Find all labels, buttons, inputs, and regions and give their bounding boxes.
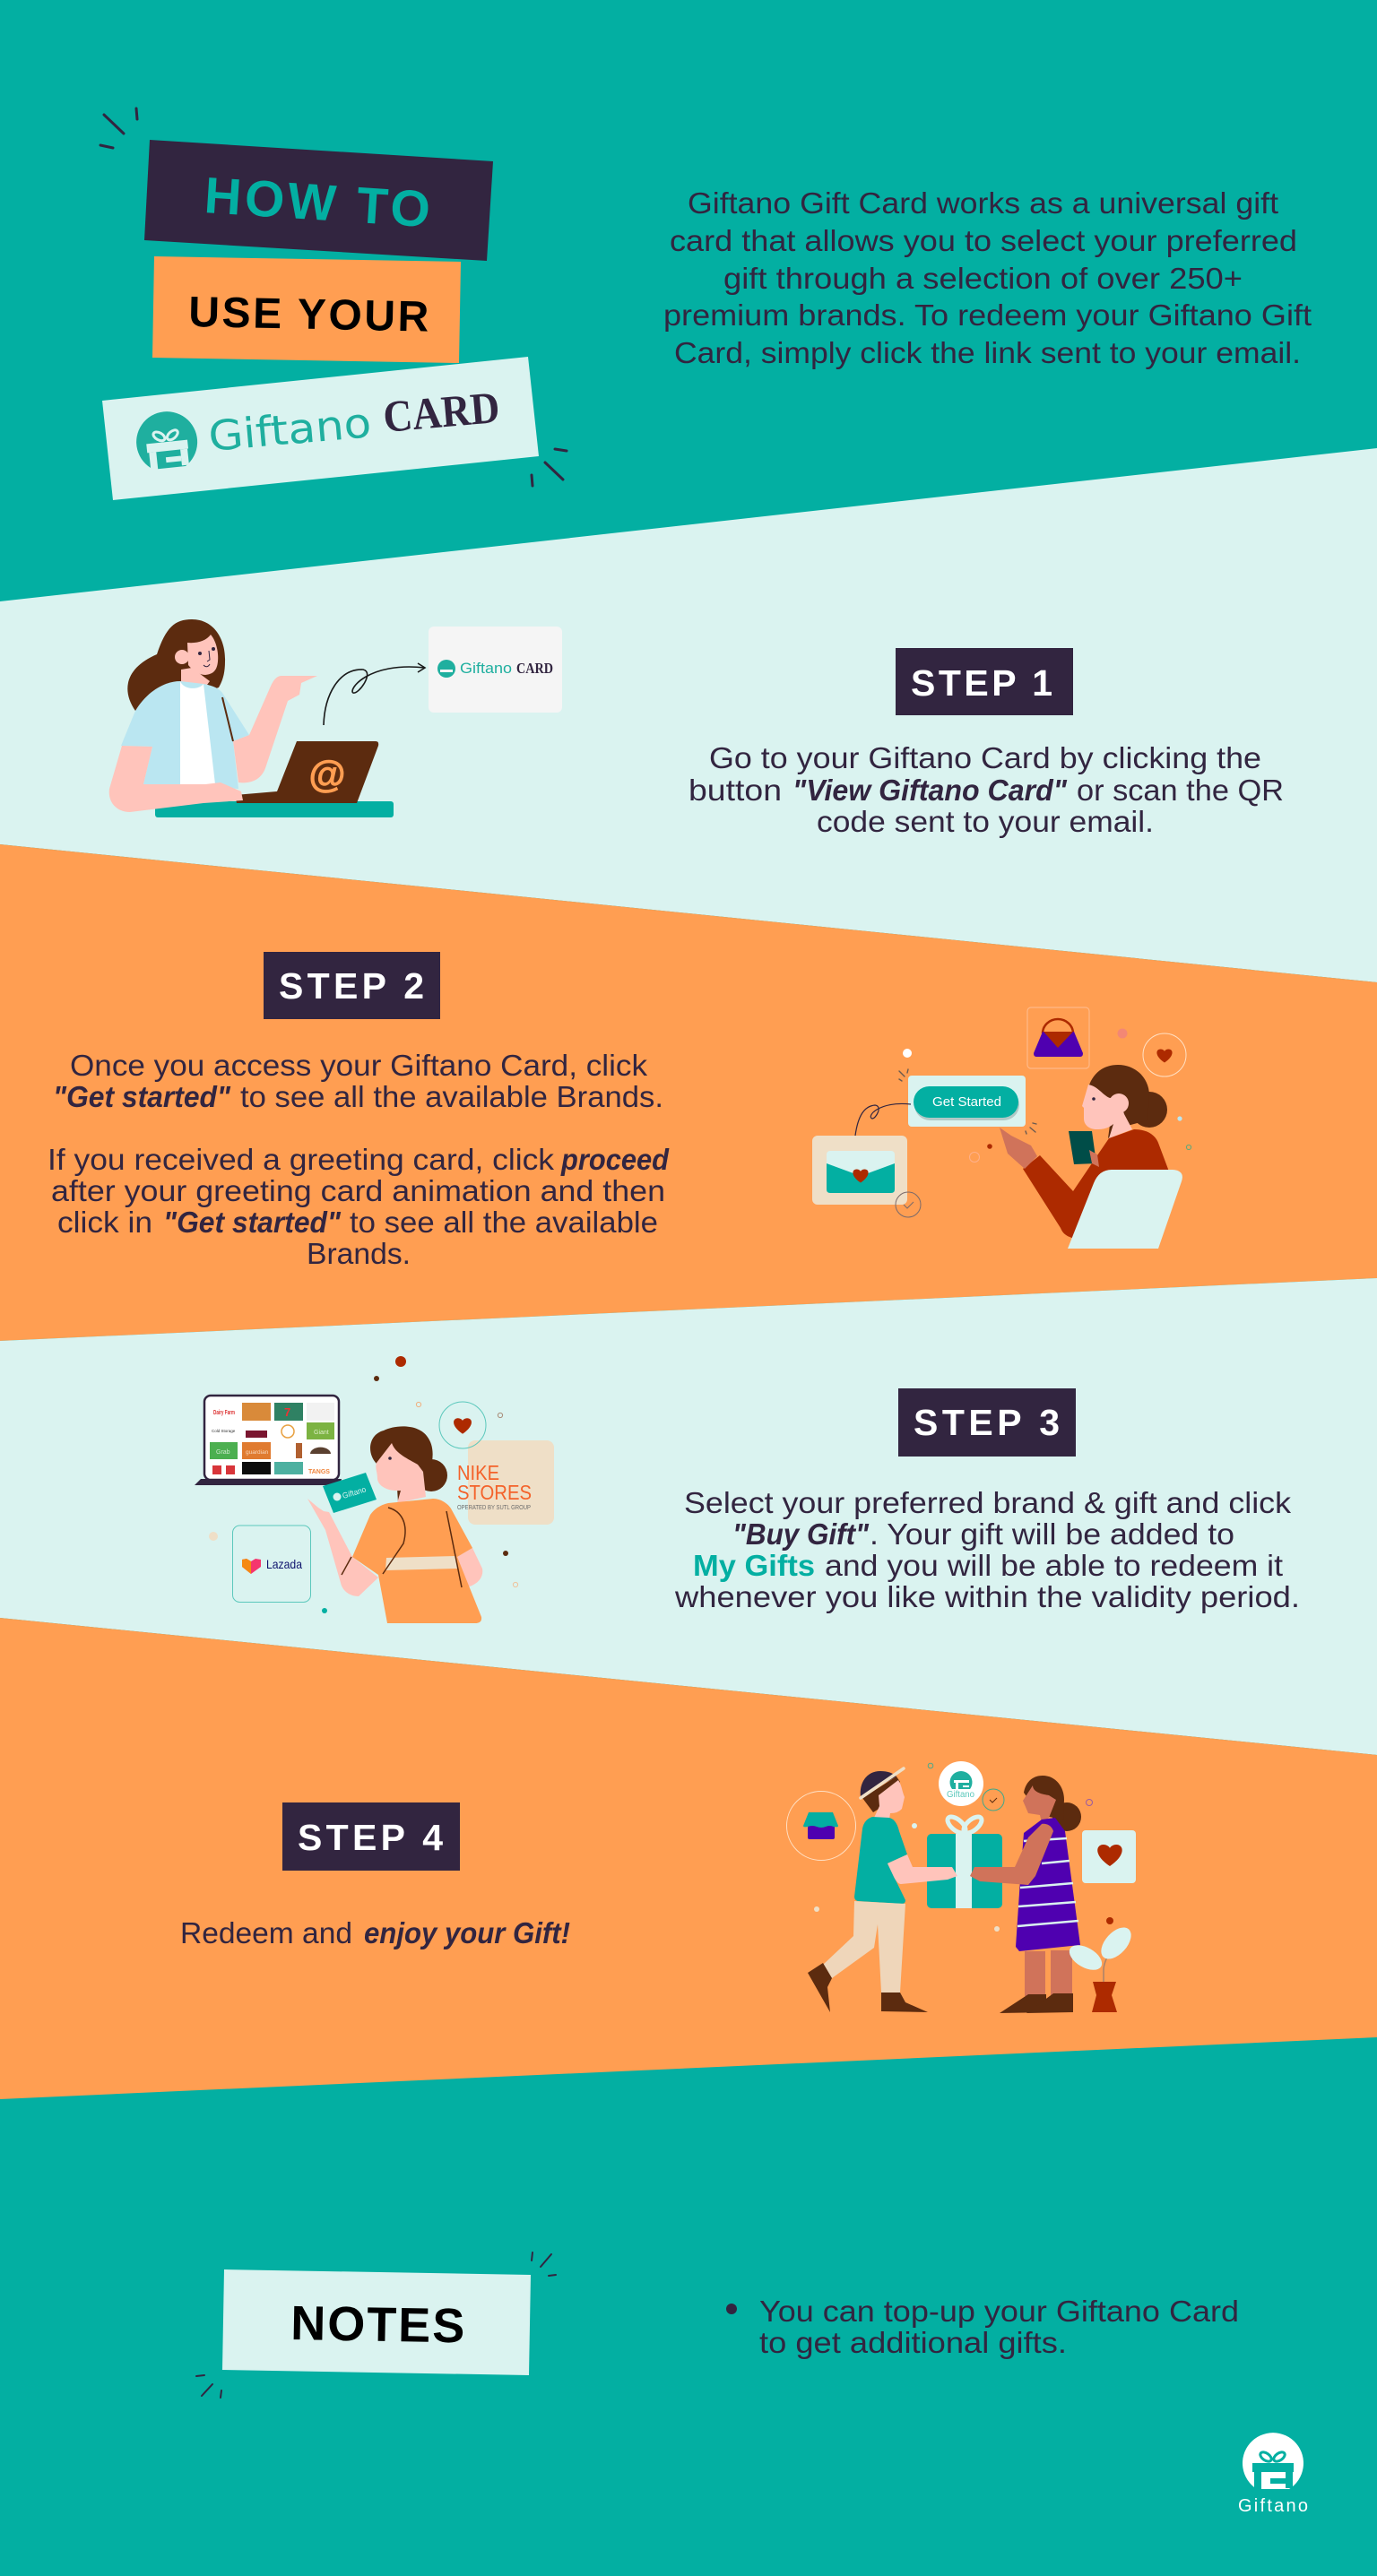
lazada card: Lazada bbox=[266, 1557, 302, 1571]
heart circle bbox=[439, 1402, 486, 1448]
illustration: woman clicking get started bbox=[812, 1007, 1191, 1249]
heart circle bbox=[1143, 1033, 1186, 1076]
plant bbox=[1065, 1922, 1137, 2012]
icon: Giftano logo bbox=[134, 409, 200, 473]
gift card bbox=[323, 1473, 377, 1513]
mini card: CARD bbox=[516, 660, 553, 677]
notes text: to get additional gifts. bbox=[759, 2326, 1067, 2359]
illustration: exchanging a gift bbox=[787, 1761, 1137, 2013]
step 3 text: Select your preferred brand & gift and click bbox=[684, 1486, 1292, 1519]
step 2 text: proceed bbox=[560, 1143, 670, 1176]
decorative dots bbox=[1117, 1029, 1128, 1038]
panel: step 2 band bbox=[0, 844, 1377, 1341]
step 4 text bbox=[180, 1916, 570, 1949]
nike stores card: STORES bbox=[457, 1481, 532, 1504]
step 4 text: Redeem and bbox=[180, 1916, 352, 1949]
laptop with brand tiles: Grab bbox=[216, 1449, 230, 1456]
intro text block: Giftano Gift Card works as a universal gift bbox=[688, 186, 1278, 220]
panel: step 3 band bbox=[0, 1278, 1377, 1755]
title banner: Giftano card: Giftano bbox=[206, 398, 373, 461]
check circle bbox=[983, 1789, 1004, 1811]
intro text block: gift through a selection of over 250+ bbox=[723, 262, 1243, 295]
sparks top left bbox=[100, 108, 137, 148]
title banner: how to: HOW TO bbox=[203, 167, 432, 238]
desk bbox=[155, 801, 394, 817]
notes text bbox=[726, 2295, 1239, 2359]
chair bbox=[1068, 1170, 1182, 1249]
title banner: use your bbox=[152, 256, 461, 363]
step 3 text: "Buy Gift" bbox=[732, 1517, 869, 1551]
step 2 text: Brands. bbox=[307, 1237, 411, 1270]
woman bbox=[307, 1426, 482, 1623]
step 1 badge: STEP 1 bbox=[911, 662, 1052, 704]
woman: Giftano bbox=[342, 1484, 367, 1500]
panel: step 4 band bbox=[0, 1618, 1377, 2099]
jacket bbox=[121, 681, 249, 789]
bag card bbox=[1027, 1007, 1089, 1068]
hand bbox=[1000, 1128, 1037, 1169]
step 1 badge bbox=[896, 648, 1073, 715]
intro text block bbox=[663, 186, 1312, 369]
title banner: use your: USE YOUR bbox=[188, 289, 429, 341]
intro text block: card that allows you to select your preferred bbox=[670, 224, 1297, 257]
step 3 text: whenever you like within the validity period. bbox=[674, 1580, 1300, 1613]
laptop with brand tiles: Giant bbox=[314, 1430, 329, 1436]
sparks bbox=[196, 2252, 556, 2398]
step 1 text: Go to your Giftano Card by clicking the bbox=[709, 741, 1261, 774]
step 3 text bbox=[674, 1486, 1300, 1613]
step 2 text bbox=[48, 1049, 670, 1270]
title banner: Giftano card bbox=[102, 357, 539, 500]
footer logo: Giftano bbox=[1238, 2496, 1308, 2516]
laptop bbox=[235, 741, 378, 803]
woman bbox=[1000, 1065, 1182, 1249]
intro text block: Card, simply click the link sent to your email. bbox=[674, 336, 1301, 369]
woman bbox=[970, 1776, 1081, 2013]
step 2 text: to see all the available bbox=[350, 1206, 658, 1239]
body bbox=[1023, 1129, 1169, 1248]
store circle bbox=[787, 1791, 855, 1861]
gift box bbox=[927, 1814, 1002, 1908]
face bbox=[175, 635, 218, 675]
step 4 text: enjoy your Gift! bbox=[364, 1916, 570, 1949]
phone bbox=[1069, 1131, 1096, 1164]
envelope card bbox=[812, 1136, 907, 1205]
notes text: You can top-up your Giftano Card bbox=[759, 2295, 1239, 2328]
notes heading: NOTES bbox=[290, 2296, 465, 2353]
title banner: Giftano card: CARD bbox=[381, 382, 501, 442]
title banner: how to bbox=[144, 140, 493, 261]
sparks bbox=[899, 1069, 1036, 1134]
decorative dots bbox=[928, 1763, 933, 1768]
neck bbox=[181, 668, 210, 688]
intro text block: premium brands. To redeem your Giftano Gift bbox=[663, 298, 1312, 332]
laptop with brand tiles: guardian bbox=[246, 1449, 269, 1456]
laptop with brand tiles: TANGS bbox=[308, 1469, 330, 1475]
nike stores card: OPERATED BY SUTL GROUP bbox=[457, 1505, 531, 1511]
step 4 badge bbox=[282, 1802, 460, 1871]
step 1 text bbox=[688, 741, 1284, 838]
illustration: woman choosing brands bbox=[195, 1356, 554, 1623]
nike stores card: NIKE bbox=[457, 1461, 499, 1484]
mini card bbox=[429, 627, 562, 713]
notes heading bbox=[196, 2252, 556, 2398]
step 3 text: My Gifts bbox=[693, 1549, 815, 1582]
decorative dots bbox=[395, 1356, 406, 1367]
step 2 text: If you received a greeting card, click bbox=[48, 1143, 555, 1176]
get started button: Get Started bbox=[932, 1094, 1001, 1110]
right arm bbox=[233, 676, 317, 782]
arrow bbox=[324, 663, 425, 725]
step 1 text: or scan the QR bbox=[1077, 774, 1284, 807]
laptop with brand tiles bbox=[195, 1396, 342, 1485]
step 3 badge bbox=[898, 1388, 1076, 1457]
arms bbox=[307, 1499, 378, 1596]
Giftano logo badge bbox=[939, 1761, 983, 1806]
laptop with brand tiles: Dairy Farm bbox=[213, 1410, 235, 1416]
heart card bbox=[1082, 1830, 1136, 1883]
step 3 text: . Your gift will be added to bbox=[870, 1517, 1234, 1551]
left arm bbox=[109, 746, 243, 812]
step 2 text: Once you access your Giftano Card, click bbox=[70, 1049, 648, 1082]
curly connector bbox=[855, 1103, 911, 1136]
shirt bbox=[352, 1499, 481, 1623]
laptop with brand tiles: Cold Storage bbox=[212, 1429, 236, 1433]
shirt bbox=[180, 681, 215, 784]
get started button bbox=[908, 1076, 1026, 1127]
title: how to use your Giftano card bbox=[100, 108, 567, 500]
lazada card bbox=[233, 1526, 310, 1603]
step 2 text: after your greeting card animation and then bbox=[51, 1174, 665, 1207]
hair bbox=[127, 619, 225, 711]
step 1 text: button bbox=[688, 774, 782, 807]
step 2 badge bbox=[264, 952, 440, 1019]
nike stores card bbox=[457, 1440, 554, 1525]
footer logo bbox=[1238, 2433, 1308, 2516]
mini card: Giftano bbox=[460, 660, 512, 677]
step 3 text: and you will be able to redeem it bbox=[825, 1549, 1283, 1582]
panel: step 1 band bbox=[0, 448, 1377, 982]
illustration: woman with laptop bbox=[109, 619, 562, 817]
step 2 text: to see all the available Brands. bbox=[240, 1080, 663, 1113]
step 1 text: code sent to your email. bbox=[817, 805, 1154, 838]
man bbox=[808, 1768, 957, 2012]
laptop: @ bbox=[309, 753, 345, 795]
laptop with brand tiles: 7 bbox=[284, 1405, 290, 1419]
Giftano logo badge: Giftano bbox=[947, 1790, 974, 1800]
step 4 badge: STEP 4 bbox=[298, 1817, 443, 1858]
step 2 text: click in bbox=[57, 1206, 152, 1239]
step 2 text: "Get started" bbox=[163, 1206, 341, 1239]
check circle bbox=[896, 1192, 921, 1217]
step 2 text: "Get started" bbox=[53, 1080, 230, 1113]
step 1 text: "View Giftano Card" bbox=[792, 774, 1067, 807]
step 3 badge: STEP 3 bbox=[914, 1402, 1060, 1443]
sparks bottom right bbox=[532, 449, 567, 486]
step 2 badge: STEP 2 bbox=[279, 965, 424, 1007]
